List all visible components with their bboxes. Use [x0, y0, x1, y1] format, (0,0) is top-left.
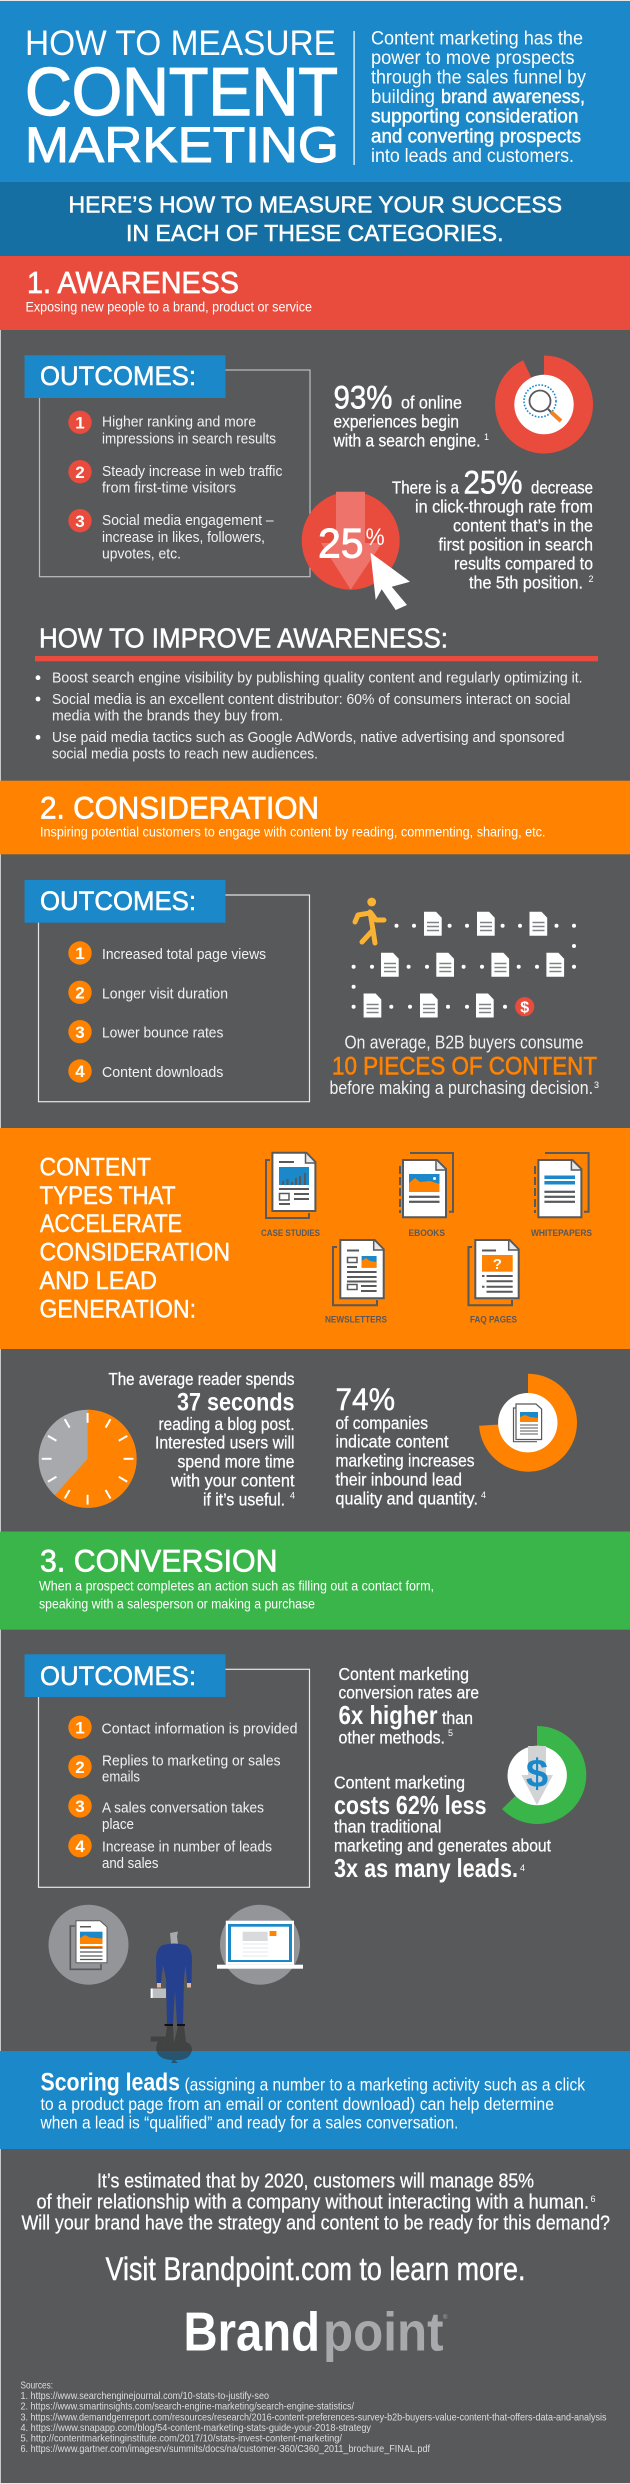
sources: 6. https://www.gartner.com/imagesrv/summits/docs/na/customer-360/C360_2011_brochure_FINAL.pdf [20, 2443, 430, 2455]
stat: 37 seconds: The average reader spends [108, 1369, 295, 1389]
icon: 25 percent click [302, 492, 410, 610]
stat: 74 percent: 4 [481, 1490, 486, 1500]
call to action: Visit Brandpoint.com to learn more. [106, 2251, 526, 2287]
stat: 10 pieces of content: 10 PIECES OF CONTENT [332, 1052, 597, 1080]
stat: 74 percent: 74% [336, 1381, 395, 1417]
panel: how to improve awareness: Boost search engine visibility by publishing quality content and regularly optimizing it. [52, 671, 583, 687]
panel: measure banner: HERE’S HOW TO MEASURE YOUR SUCCESS [68, 192, 562, 218]
icon: 25 percent click: 25 [318, 520, 364, 567]
panel: scoring leads: to a product page from an email or content download) can help determine [40, 2094, 554, 2114]
outcome 4: 4 [75, 1837, 85, 1856]
icon: newsletters [325, 1240, 387, 1326]
title: CONTENT [25, 54, 338, 130]
outcome 2 [68, 460, 282, 496]
icon: faq pages: ? [493, 1256, 502, 1273]
heading: AND LEAD [40, 1267, 157, 1295]
stat: 74 percent: marketing increases [336, 1451, 475, 1471]
stat: costs 62 percent less: marketing and generates about [334, 1836, 551, 1856]
stat: costs 62 percent less: 4 [520, 1863, 525, 1873]
stat: 6x higher: than [442, 1708, 473, 1728]
stat: 25 percent decrease: first position in search [438, 534, 593, 554]
outcome 4: and sales [102, 1856, 158, 1872]
intro paragraph: supporting consideration [371, 107, 578, 128]
outcome 1: impressions in search results [102, 431, 276, 447]
panel: content types [0, 1128, 630, 1349]
panel: conversion outcomes: OUTCOMES: [40, 1661, 196, 1691]
stat: 6x higher: other methods. [338, 1727, 445, 1747]
stat: 6x higher: Content marketing [338, 1664, 469, 1684]
heading: CONSIDERATION [40, 1239, 230, 1267]
outcome 2: 2 [75, 463, 85, 482]
stat: 25 percent decrease: 2 [588, 574, 594, 584]
icon: case studies [261, 1153, 320, 1239]
stat: 37 seconds: 37 seconds [177, 1388, 294, 1416]
icon: whitepapers [531, 1153, 592, 1239]
stat: 25 percent decrease: content that’s in the [453, 516, 593, 536]
panel: consideration outcomes [24, 880, 310, 1102]
stat: 37 seconds: with your content [170, 1471, 295, 1491]
panel: conversion heading [0, 1532, 630, 1630]
stat: 74 percent: of companies [336, 1413, 428, 1433]
outcome 3: 3 [75, 1023, 85, 1042]
panel: how to improve awareness: media with the brands they buy from. [52, 709, 283, 725]
panel: awareness outcomes: OUTCOMES: [40, 361, 196, 391]
stat: 93 percent [333, 379, 489, 450]
stat: 6x higher: conversion rates are [338, 1683, 479, 1703]
icon: search donut [495, 355, 593, 453]
heading: TYPES THAT [40, 1182, 176, 1210]
panel: consideration heading: 2. CONSIDERATION [40, 789, 319, 825]
stat: 6x higher: 5 [448, 1728, 453, 1738]
outcome 1: Increased total page views [102, 947, 266, 963]
stat: 10 pieces of content [330, 1032, 599, 1098]
icon: whitepapers: WHITEPAPERS [531, 1228, 592, 1239]
sources: 5. http://contentmarketinginstitute.com/2017/10/stats-invest-content-marketing/ [20, 2433, 342, 2445]
closing statement: 6 [590, 2194, 596, 2204]
outcome 1: Contact information is provided [102, 1721, 298, 1737]
icon: newsletters: NEWSLETTERS [325, 1315, 387, 1326]
stat: 25 percent decrease: decrease [531, 477, 593, 497]
stat: 93 percent: with a search engine. [333, 430, 480, 450]
stat: 25 percent decrease: 25% [464, 464, 522, 500]
panel: awareness outcomes [24, 355, 310, 577]
logo: Brandpoint: ® [443, 2314, 448, 2321]
panel: awareness heading: Exposing new people to a brand, product or service [26, 300, 312, 315]
stat: costs 62 percent less: costs 62% less [334, 1790, 486, 1820]
closing statement: of their relationship with a company without interacting with a human. [36, 2191, 589, 2213]
intro paragraph: through the sales funnel by [371, 68, 586, 88]
panel: conversion heading: 3. CONVERSION [40, 1543, 278, 1579]
outcome 1 [68, 941, 266, 965]
closing statement [22, 2170, 610, 2235]
intro paragraph: building [371, 87, 435, 108]
panel: awareness heading [0, 256, 630, 330]
stat: 93 percent: experiences begin [334, 412, 459, 432]
panel: how to improve awareness: social media posts to reach new audiences. [52, 747, 318, 763]
outcome 2: 2 [75, 1758, 85, 1777]
stat: 74 percent [336, 1381, 486, 1509]
illustration: document bubble [48, 1905, 128, 1985]
outcome 3 [68, 1020, 223, 1043]
icon: ebooks: EBOOKS [408, 1228, 445, 1239]
illustration: businessman reflection [151, 2026, 192, 2063]
icon: faq pages [468, 1240, 519, 1326]
stat: costs 62 percent less [334, 1773, 551, 1883]
icon: cost donut: $ [526, 1752, 548, 1796]
illustration: businessman [151, 1932, 192, 2026]
panel: conversion heading: speaking with a salesperson or making a purchase [39, 1596, 315, 1611]
panel: how to improve awareness: Use paid media tactics such as Google AdWords, native advertising and sponsored [52, 730, 564, 746]
outcome 3: place [102, 1817, 134, 1833]
panel: consideration heading [0, 781, 630, 854]
panel: conversion outcomes [24, 1654, 310, 1887]
panel: consideration outcomes: OUTCOMES: [40, 886, 196, 916]
panel: measure banner: IN EACH OF THESE CATEGORIES. [126, 220, 504, 246]
panel: header [0, 1, 630, 182]
outcome 4 [68, 1059, 223, 1083]
stat: costs 62 percent less: than traditional [334, 1816, 442, 1836]
outcome 2: Replies to marketing or sales [102, 1753, 280, 1769]
intro paragraph: power to move prospects [371, 48, 574, 69]
icon: dollar goal [515, 997, 534, 1016]
stat: 74 percent: quality and quantity. [336, 1489, 478, 1509]
outcome 1: Higher ranking and more [102, 415, 256, 431]
outcome 2 [68, 1753, 280, 1786]
stat: costs 62 percent less: 3x as many leads. [334, 1853, 518, 1883]
chart: buyer journey path [352, 898, 576, 1018]
outcome 1: 1 [75, 414, 85, 432]
outcome 3: upvotes, etc. [102, 547, 181, 563]
stat: 25 percent decrease: in click-through rate from [415, 497, 593, 517]
outcome 2 [68, 981, 228, 1004]
outcome 3: 3 [75, 1797, 85, 1816]
panel: measure banner [0, 182, 630, 256]
heading: GENERATION: [40, 1295, 196, 1323]
stat: 93 percent: of online [401, 392, 462, 412]
intro paragraph: into leads and customers. [371, 146, 574, 167]
stat: 10 pieces of content: 3 [594, 1080, 599, 1090]
stat: 37 seconds: if it’s useful. [203, 1489, 285, 1509]
icon: ebooks [400, 1153, 453, 1239]
intro paragraph: Content marketing has the [371, 28, 583, 49]
panel: awareness heading: 1. AWARENESS [27, 265, 239, 300]
panel: how to improve awareness: HOW TO IMPROVE AWARENESS: [39, 622, 448, 653]
stat: 25 percent decrease: There is a [392, 477, 459, 497]
panel: consideration heading: Inspiring potential customers to engage with content by reading, commenting, sharing, etc. [40, 825, 546, 840]
stat: 37 seconds: 4 [290, 1491, 295, 1501]
panel: scoring leads: when a lead is “qualified” and ready for a sales conversation. [40, 2112, 458, 2132]
outcome 4: Increase in number of leads [102, 1840, 272, 1856]
stat: 6x higher [338, 1664, 479, 1747]
intro paragraph [371, 28, 586, 167]
outcome 3: Social media engagement – [102, 513, 274, 529]
stat: 25 percent decrease: the 5th position. [469, 572, 583, 592]
icon: walking figure [355, 898, 384, 943]
stat: 6x higher: 6x higher [338, 1700, 438, 1730]
outcome 4: Content downloads [102, 1065, 223, 1081]
stat: 37 seconds: Interested users will [155, 1433, 294, 1453]
stat: 37 seconds: spend more time [178, 1452, 294, 1472]
outcome 4 [68, 1834, 272, 1872]
sources: 4. https://www.snapapp.com/blog/54-content-marketing-stats-guide-your-2018-strategy [20, 2422, 372, 2434]
stat: 25 percent decrease [392, 464, 594, 592]
outcome 3: Lower bounce rates [102, 1026, 223, 1042]
outcome 1: 1 [75, 1718, 85, 1738]
outcome 3: A sales conversation takes [102, 1800, 264, 1816]
icon: cost donut [502, 1726, 586, 1824]
title: HOW TO MEASURE [25, 24, 336, 63]
intro paragraph: and converting prospects [371, 126, 581, 147]
outcome 2: Steady increase in web traffic [102, 464, 282, 480]
panel: scoring leads: (assigning a number to a marketing activity such as a click [184, 2075, 585, 2095]
logo: Brandpoint [184, 2301, 448, 2363]
heading: ACCELERATE [40, 1210, 182, 1238]
heading [40, 1153, 230, 1323]
outcome 1 [68, 1716, 298, 1739]
outcome 1 [68, 411, 276, 447]
sources: 1. https://www.searchenginejournal.com/10-stats-to-justify-seo [20, 2390, 269, 2402]
panel: how to improve awareness: Social media is an excellent content distributor: 60% of consumers interact on social [52, 692, 570, 708]
outcome 3: 3 [75, 512, 85, 531]
closing statement: It’s estimated that by 2020, customers will manage 85% [97, 2170, 534, 2192]
stat: 37 seconds [108, 1369, 295, 1509]
stat: 37 seconds: reading a blog post. [158, 1414, 294, 1434]
outcome 3 [68, 1794, 264, 1833]
stat: 74 percent: their inbound lead [336, 1470, 462, 1490]
panel: conversion heading: When a prospect completes an action such as filling out a contact form, [39, 1579, 434, 1594]
icon: case studies: CASE STUDIES [261, 1228, 320, 1239]
stat: 10 pieces of content: On average, B2B buyers consume [344, 1032, 584, 1052]
stat: 74 percent: indicate content [336, 1432, 449, 1452]
title [25, 24, 339, 173]
panel: scoring leads: Scoring leads [40, 2069, 180, 2097]
sources: 2. https://www.smartinsights.com/search-engine-marketing/search-engine-statistics/ [20, 2401, 354, 2413]
title: MARKETING [25, 117, 339, 173]
stat: 93 percent: 93% [334, 379, 392, 415]
logo: Brandpoint: Brand [184, 2301, 320, 2363]
illustration: laptop bubble [217, 1905, 303, 1985]
stat: 25 percent decrease: results compared to [454, 553, 593, 573]
icon: faq pages: FAQ PAGES [470, 1315, 517, 1326]
outcome 2: emails [102, 1770, 140, 1786]
logo: Brandpoint: point [323, 2301, 444, 2363]
stat: 93 percent: 1 [484, 432, 489, 442]
icon: clock [39, 1410, 137, 1508]
sources: Sources: [20, 2379, 53, 2391]
icon: lead quality donut [479, 1374, 577, 1472]
outcome 2: 2 [75, 984, 85, 1002]
intro paragraph: brand awareness, [441, 87, 585, 108]
outcome 4: 4 [75, 1062, 85, 1081]
outcome 1: 1 [75, 944, 85, 963]
stat: 10 pieces of content: before making a purchasing decision. [330, 1078, 593, 1098]
outcome 2: Longer visit duration [102, 986, 228, 1002]
outcome 3 [68, 509, 274, 563]
outcome 3: increase in likes, followers, [102, 530, 265, 546]
sources [20, 2379, 606, 2455]
icon: dollar goal: $ [520, 1000, 529, 1016]
outcome 2: from first-time visitors [102, 480, 236, 496]
icon: 25 percent click: % [366, 524, 385, 551]
panel: scoring leads [0, 2051, 630, 2149]
heading: CONTENT [40, 1153, 151, 1181]
stat: costs 62 percent less: Content marketing [334, 1773, 465, 1793]
panel: how to improve awareness [35, 622, 598, 763]
